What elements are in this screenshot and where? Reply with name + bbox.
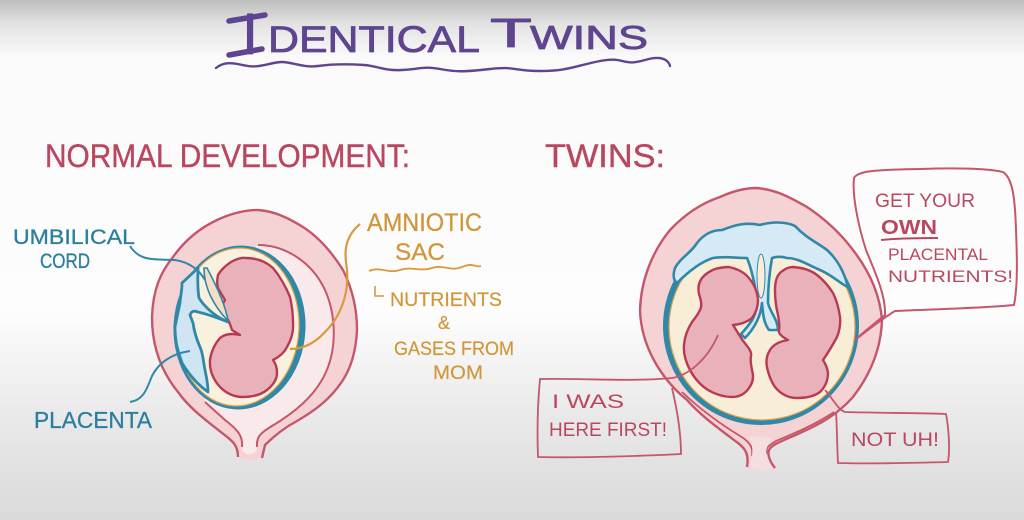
amniotic fluid [173,245,303,409]
leader: amniotic sac [290,224,360,349]
label: placenta: PLACENTA [34,407,153,433]
title underline [216,58,670,71]
leader: umbilical cord [130,246,205,280]
callout: get your own placental nutrients: NUTRIENTS! [888,267,1013,286]
uterus outer wall [640,188,882,468]
fetus [210,258,293,397]
title: DENTICAL [268,19,480,60]
title: WINS [530,19,648,56]
right fetus [766,267,840,398]
callout: get your own placental nutrients: PLACENTAL [888,245,988,264]
callout: get your own placental nutrients: GET YOUR [875,191,975,212]
note: nutrients and gases: NUTRIENTS [390,290,502,311]
heading: twins: TWINS: [545,138,665,174]
septum centre [757,254,765,298]
uterus outer wall [152,210,357,458]
pale cavity [200,245,334,454]
callout: get your own placental nutrients: OWN [881,217,937,239]
label: umbilical cord: CORD [40,250,90,273]
inner lines to cervix [682,392,834,456]
amniotic membrane [169,242,310,413]
callout: I was here first: HERE FIRST! [549,420,667,441]
note: nutrients and gases [375,286,514,384]
cervix pale centre [748,436,772,470]
note: nutrients and gases: GASES FROM [394,339,514,360]
diagram: normal development uterus [152,210,357,460]
callout: not uh: NOT UH! [851,430,939,451]
callout: get your own placental nutrients [854,168,1017,340]
left fetus [684,267,758,397]
callout: I was here first: I WAS [552,392,624,413]
callout: I was here first [538,335,718,457]
label: amniotic sac: AMNIOTIC [367,209,482,237]
title: T [490,10,532,56]
uterus inner wall [205,245,334,447]
amniotic underline [369,265,481,271]
note: nutrients and gases: & [438,313,450,333]
title: I [242,2,258,67]
amniotic membrane [663,227,859,425]
leader: placenta [130,351,190,402]
label: umbilical cord: UMBILICAL [13,226,135,249]
placenta [175,268,228,392]
umbilical cord [204,268,228,321]
amniotic fluid [669,234,855,420]
uterus fill [152,210,357,460]
title [229,2,648,67]
heading: normal development: NORMAL DEVELOPMENT: [45,138,410,174]
label: amniotic sac [367,209,482,266]
label: amniotic sac: SAC [395,239,445,266]
note: nutrients and gases: MOM [433,363,483,384]
diagram: twins uterus [640,188,882,470]
label: umbilical cord [13,226,135,273]
placenta and septum [674,222,848,338]
callout: not uh [825,390,949,463]
uterus fill [640,188,882,470]
